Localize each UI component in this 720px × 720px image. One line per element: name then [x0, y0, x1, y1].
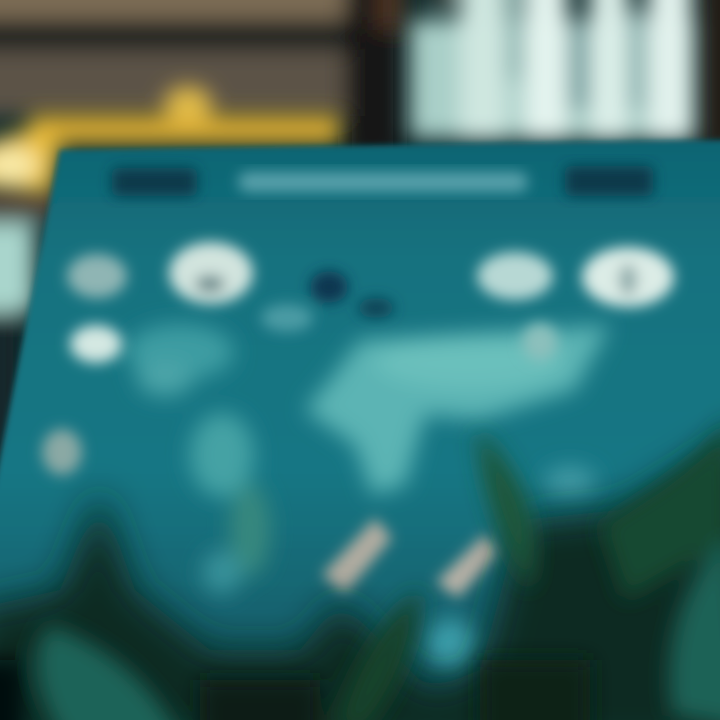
world map: continents: [126, 324, 610, 671]
heading tabs: dark end labels: [112, 166, 653, 196]
icon row: pale rounded icons: [67, 242, 674, 307]
background: glowing yellow shelf light: [0, 86, 340, 195]
background: room behind the board: [0, 0, 720, 532]
icon: dark central markers: [261, 271, 394, 332]
foreground: blurred green plant leaves: [0, 420, 720, 720]
callout markers: pale blobs: [42, 323, 558, 598]
background: bright striped window: [410, 0, 695, 140]
heading: blurred title: [238, 172, 528, 192]
